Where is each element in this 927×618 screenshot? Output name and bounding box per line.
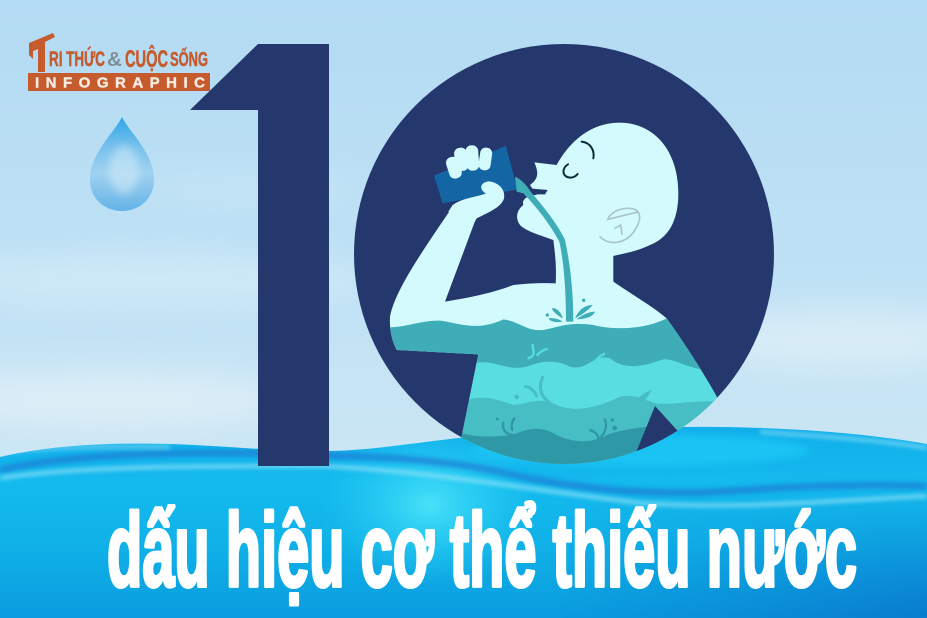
digit 0: circle with drinking figure (354, 44, 774, 477)
drinking figure (390, 122, 717, 464)
logo wordmark: CUỘC (125, 45, 168, 73)
mouth (529, 188, 548, 194)
eyebrow and eye (563, 142, 594, 178)
logo: Tri Thức & Cuộc Sống Infographic (28, 33, 210, 92)
water stream (515, 177, 573, 322)
bottle (434, 146, 517, 203)
ear (600, 208, 640, 242)
splashes at chest (546, 299, 595, 322)
logo bar: INFOGRAPHIC (35, 74, 205, 92)
logo wordmark: SỐNG (170, 47, 208, 71)
water surface (0, 420, 927, 618)
body silhouette (390, 122, 717, 464)
digit 1 (190, 44, 329, 466)
logo wordmark (49, 45, 208, 73)
logo wordmark: RI THỨC (49, 47, 105, 71)
circle (354, 44, 774, 464)
logo wordmark: & (107, 49, 122, 71)
gap between arm and torso (636, 406, 678, 451)
water layers inside body (390, 318, 717, 464)
icon: water drop (90, 117, 154, 211)
fist (444, 145, 504, 230)
splashes on torso (528, 345, 604, 363)
logo mark: T (29, 33, 55, 72)
